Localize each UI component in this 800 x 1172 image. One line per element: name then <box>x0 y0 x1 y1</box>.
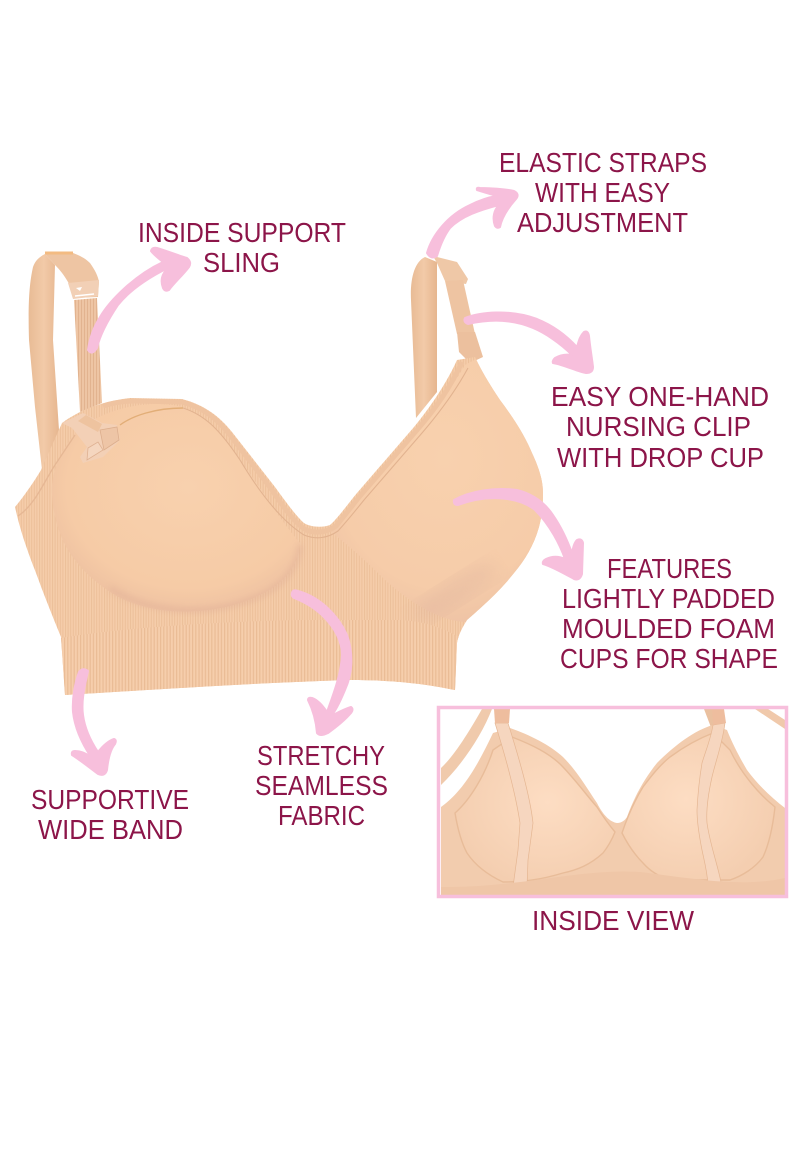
label: inside support sling: SLING <box>203 247 280 278</box>
arrow: stretchy fabric <box>292 590 352 735</box>
inset right cup <box>622 733 775 880</box>
inset straps <box>441 709 492 785</box>
infographic canvas <box>15 152 788 930</box>
right cup <box>330 357 560 622</box>
left shoulder strap <box>29 252 102 470</box>
label: wide band: SUPPORTIVE <box>31 784 189 815</box>
label: nursing clip <box>551 381 769 473</box>
label: nursing clip: NURSING CLIP <box>566 411 751 442</box>
inset left cup <box>455 737 615 882</box>
inset bra body <box>441 725 785 897</box>
label: seamless fabric: STRETCHY <box>257 740 385 771</box>
inset sling left <box>495 723 533 887</box>
label: nursing clip: WITH DROP CUP <box>557 442 764 473</box>
label: padded cups: LIGHTLY PADDED <box>562 583 775 614</box>
label: padded cups: FEATURES <box>607 553 732 584</box>
right shoulder strap <box>411 256 483 418</box>
label: seamless fabric: SEAMLESS <box>255 770 388 801</box>
neckline trim <box>103 362 462 532</box>
inset sling right <box>697 723 725 887</box>
label: elastic straps: ELASTIC STRAPS <box>499 147 707 178</box>
label: padded cups: MOULDED FOAM <box>562 613 775 644</box>
arrow: wide band <box>72 669 116 775</box>
arrow: nursing clip <box>464 312 593 373</box>
label: nursing clip: EASY ONE-HAND <box>551 381 769 412</box>
inset pink border <box>438 708 786 896</box>
arrow: elastic straps <box>427 188 518 257</box>
bra body with cups and band <box>15 357 560 700</box>
armhole trim <box>18 435 75 516</box>
label: seamless fabric <box>255 740 388 831</box>
inset caption: INSIDE VIEW <box>532 905 694 936</box>
main bra illustration <box>15 252 560 700</box>
left cup <box>52 404 300 612</box>
label: seamless fabric: FABRIC <box>278 800 365 831</box>
label: padded cups <box>560 553 778 674</box>
label: elastic straps: ADJUSTMENT <box>517 207 688 238</box>
nursing clip <box>62 408 183 463</box>
label: wide band: WIDE BAND <box>38 814 183 845</box>
label: wide band <box>31 784 189 845</box>
label: inside support sling: INSIDE SUPPORT <box>138 217 346 248</box>
label: elastic straps <box>499 147 707 238</box>
wide band <box>61 620 458 695</box>
inset panel: inside view <box>438 708 786 897</box>
label: elastic straps: WITH EASY <box>535 177 670 208</box>
arrow: inside support sling <box>88 248 190 353</box>
arrow: moulded foam cups <box>454 489 583 579</box>
label: inside support sling <box>138 217 346 278</box>
label: padded cups: CUPS FOR SHAPE <box>560 643 778 674</box>
